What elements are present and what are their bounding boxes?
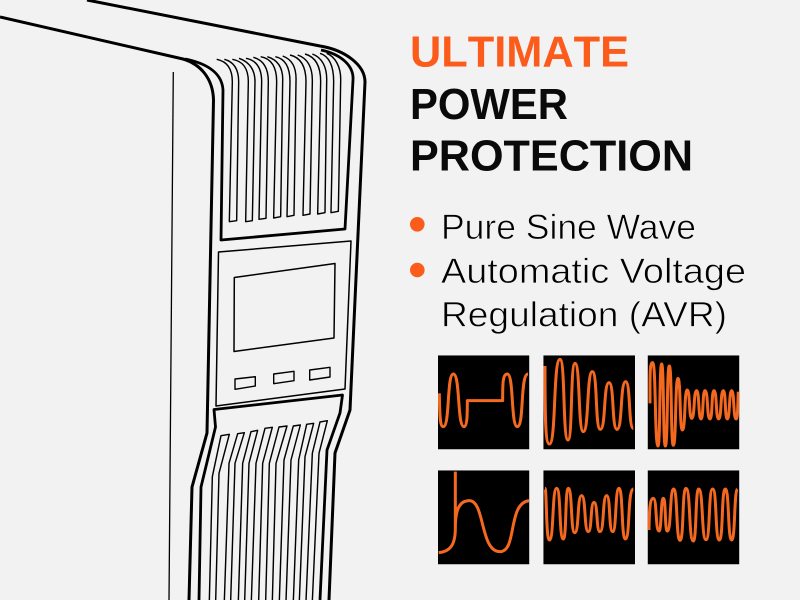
control buttons [235,367,330,389]
waveform tile 3: damped oscillation [648,355,739,449]
text: Pure Sine Wave: Pure Sine Wave [441,208,696,247]
feature list [410,208,746,335]
waveform tile 2: sag [543,355,635,449]
device outer left edge [0,17,214,600]
bullet: Pure Sine Wave [410,217,425,232]
title line: POWER: POWER [410,80,568,129]
waveform tile 4: spike and slow wave [438,470,529,564]
lower vent panel outline [199,395,342,600]
waveform tile 1: flat interruption [438,355,529,449]
text: Automatic Voltage: Automatic Voltage [441,252,746,291]
control panel frame [216,241,351,406]
side panel seam [169,72,173,600]
waveform grid, bottom row [438,470,739,564]
bullet: Automatic Voltage Regulation [410,263,425,277]
illustration: UPS tower device [0,0,365,600]
title line: ULTIMATE: ULTIMATE [410,28,629,76]
lower vent slots [209,421,327,600]
upper vent panel outline [185,50,353,240]
title [410,28,693,180]
device outer right edge [87,0,365,600]
upper vent slots [217,53,341,222]
waveform grid, top row [438,355,739,449]
title line: PROTECTION: PROTECTION [410,132,693,180]
text: Regulation (AVR): Regulation (AVR) [441,296,727,335]
LCD screen [234,264,335,352]
waveform tile 5: varying amplitude [543,470,635,564]
waveform tile 6: swell [648,470,739,564]
